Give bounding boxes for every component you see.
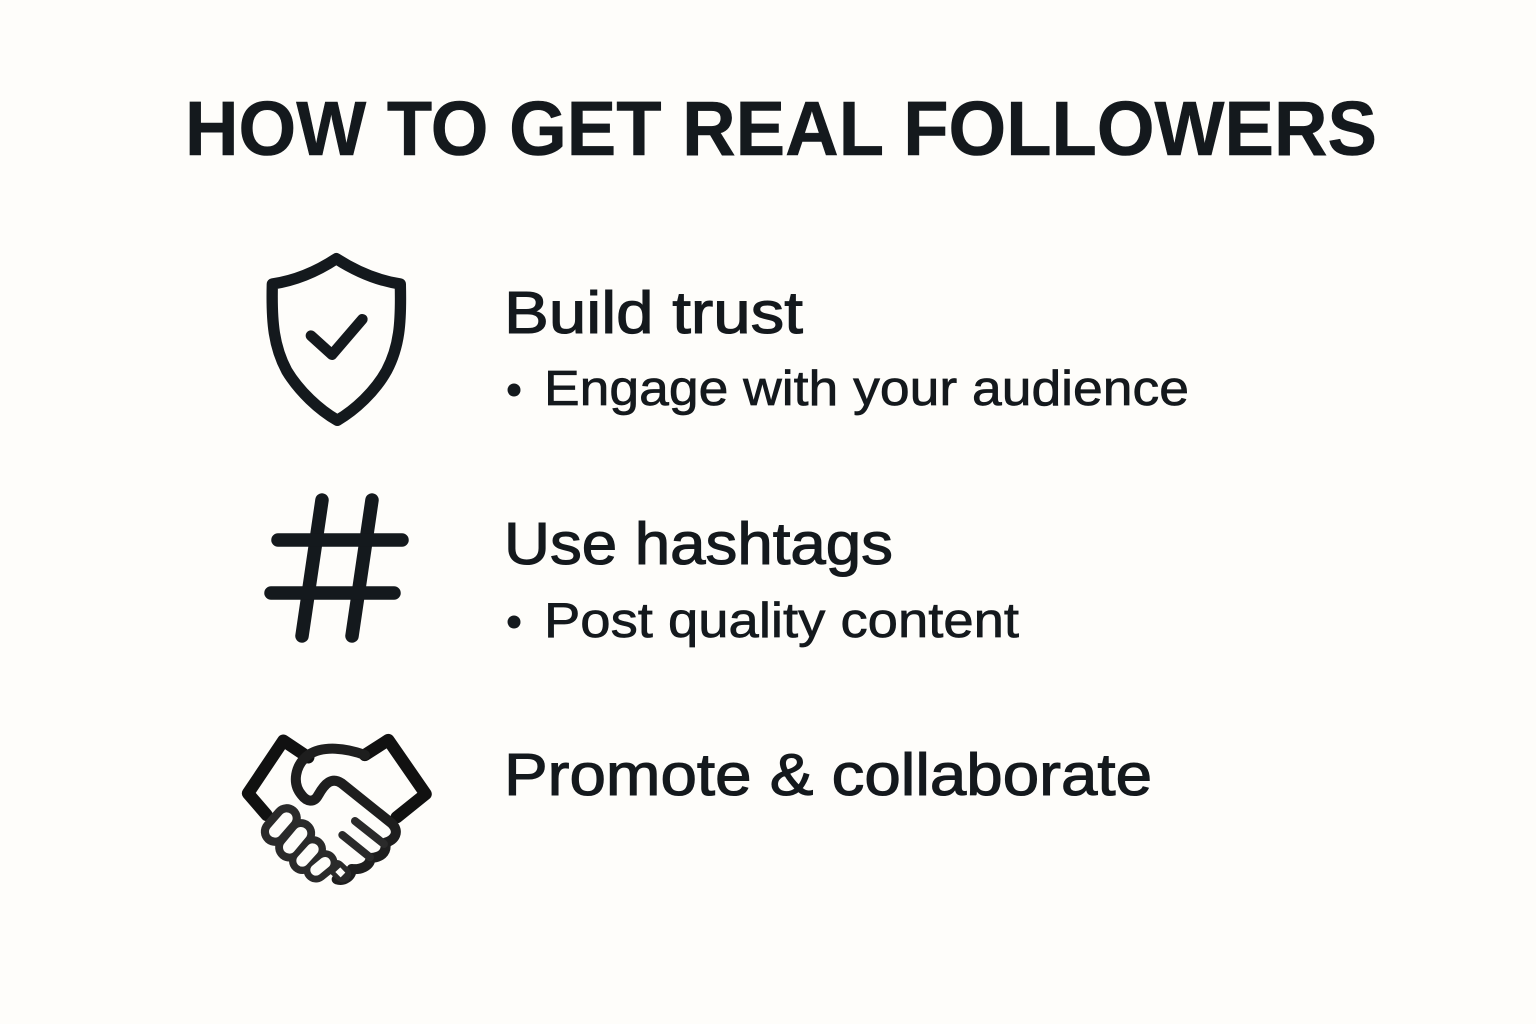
right cuff bbox=[365, 740, 426, 817]
upper hand bbox=[296, 749, 396, 880]
fist finger gaps bbox=[275, 818, 325, 870]
heading: use hashtags: Use hashtags bbox=[504, 511, 893, 577]
heading: build trust: Build trust bbox=[504, 280, 803, 346]
icon: handshake bbox=[248, 740, 426, 880]
finger lines bbox=[355, 821, 384, 844]
left fist bbox=[275, 818, 343, 874]
bullet: engage with your audience: Engage with your audience bbox=[544, 362, 1189, 416]
icon: hashtag bbox=[271, 500, 402, 636]
title: HOW TO GET REAL FOLLOWERS bbox=[185, 86, 1377, 172]
heading: promote and collaborate: Promote & collaborate bbox=[504, 742, 1152, 808]
small knuckle gap bbox=[335, 867, 345, 877]
left cuff bbox=[248, 741, 308, 815]
icon: shield with check mark bbox=[272, 259, 401, 420]
bullet: post quality content: Post quality content bbox=[544, 594, 1019, 648]
